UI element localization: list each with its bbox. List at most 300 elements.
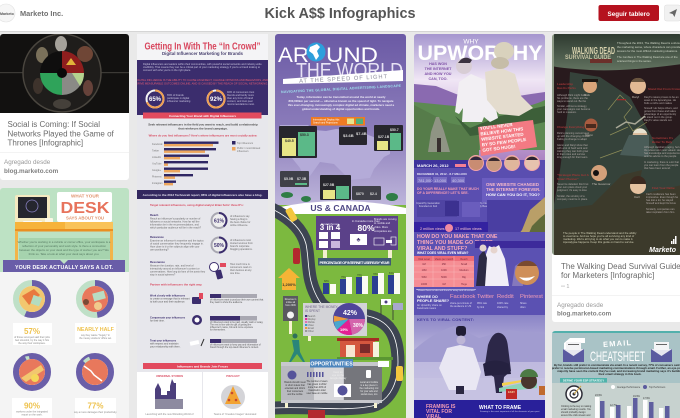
panel: usage stats: 80% [357,223,375,233]
pie chart: 19% [340,327,348,332]
panel: opportunities: is a key piece in [360,384,378,387]
right text columns: Sometimes It's [652,136,673,140]
chart legend [611,385,666,389]
panel: where the money is spent: Other [308,330,314,333]
map box: Western Europe: $7.4B [356,131,367,136]
map box: Western Europe [339,127,367,145]
bar chart [152,141,261,185]
map box: Latin America: $7.3B [297,177,307,181]
panel: purple intro [136,60,268,115]
right text columns: to stand out in the group. [644,115,673,119]
panel: usage stats: ♣ [357,238,361,244]
intro paragraph: 800,000km per second — otherwise known as the speed of light. To navigate [288,99,394,103]
callout: growth: online ad [286,302,296,304]
stat band: 2 million views [420,227,445,231]
panel: opportunities: user base on mobile [307,392,328,395]
pin: Around the World at the Speed of Light [270,34,406,418]
infographic: Walking Dead: scariest things in the series. [617,59,652,63]
left text columns: Change Everything [557,125,585,129]
infographic title: AR [278,44,309,67]
text: resonance: Resonance [150,260,165,264]
pink table: 25K [442,263,447,266]
panel: framing [414,400,545,418]
right text columns: and his advice to the people [644,154,677,158]
pink table: 1M [442,283,446,286]
panel: opportunities: Brands should invest [284,381,306,384]
panel: opportunities: and the mobile [287,393,303,396]
bar chart: 19.9% [633,395,641,398]
bar chart: internet users: 81% [389,272,395,275]
pink table: 100K [441,269,447,272]
stat: nearly half: say they waste "hugely" in [81,334,111,337]
infographic title: WHY [463,38,479,46]
callout: pink box: BY SO FEW PEOPLE [482,137,526,147]
bar chart: Google+ [152,169,162,172]
panel: opportunities: entertain and inform [285,387,305,390]
left text columns: Glenn and Daryl show that [557,143,588,147]
bar chart: internet users [323,272,400,294]
pink table: 10M [422,269,426,272]
text: relevance [150,236,204,251]
map box: North America: $50.3 [300,133,309,137]
bar chart: Twitter [152,150,159,152]
panel: usage stats: Brands are moving [374,217,397,221]
text: reach: Reach [150,213,159,217]
panel: timeline: Upworthy Fire [472,202,488,205]
intro paragraph: this ever-changing, increasingly complex digital ad climate, marketers need a [288,103,395,107]
text: resonance: Measure the duration, rate, and level of [150,264,194,268]
legend [311,117,365,126]
photo: couple and laughing man [475,241,545,286]
panel: where the money is spent: WHERE THE MONEY [305,305,339,309]
stat: 57%: of those surveyed said their jobs [14,336,51,339]
right text columns: In marketing, there is a lot that [644,160,679,164]
infographic title: EMAIL [603,338,632,349]
panel: timeline: DO YOUR REALLY MAKE THAT MUCH [417,187,479,191]
section bar: connecting your brand: Connecting Your Brand with Digital Influencers [169,114,236,118]
left text columns: Similar, without a strategy, [557,104,587,108]
callout: pink box: WEBSITE STARTED [481,132,525,142]
figure: man and dog [455,42,533,122]
map box: Middle East and Africa: $870 [356,192,364,196]
like count: ▫▫ 1 [561,284,570,290]
icon: yellow arrow 1,200% [278,268,300,290]
map box: North America [279,126,317,158]
closing paragraph: to overcome. And we hope you're all surviving any kind of [563,234,634,238]
road [270,208,398,409]
pink table: 500K [441,276,447,279]
row: treat: Treat your influencers [150,340,177,342]
panel: purple intro: content, and trust peer [227,99,253,103]
panel: viral story: THING YOU MADE GO SUPER [417,240,493,246]
bar chart: Facebook [152,143,163,146]
map box: Asia Pacific [374,125,403,151]
sharing platforms: Twitter [477,294,494,300]
row: work closely: Work closely with influencers [150,294,186,298]
sharing platforms: 99% rate [477,302,488,305]
left text columns: up with the changing climate. [557,134,591,138]
callout: pink box: YOU'LL NEVER [480,122,514,131]
stat: 90%: report on the work. [22,414,43,416]
bar chart: Top influencers [237,142,254,145]
icon: globe [306,42,326,62]
pin: Getting In With The In Crowd: their devices at any [230,269,252,272]
source credit: Agregado desde [557,302,604,309]
panel: framing: Framing is the most important of all the elements of your post [480,410,540,413]
bar chart: internet users: 78% [373,273,379,276]
left text columns: Failing to change to adapt [557,137,587,141]
stat: nearly half: the messy workers' office set. [79,337,112,340]
panel: timeline: The Daily Beast [471,205,489,208]
pin: Getting In With The In Crowd: blogging operations. [230,248,253,251]
row: treat: with respect and maintain [150,342,179,346]
callout: pink box: GOT SO HUGE! [482,144,516,153]
stat: 77% [74,356,117,418]
infographic: Game of Thrones wheel [0,34,129,113]
panel: opportunities: the marketing mix [360,387,379,390]
infographic: Walking Dead: Glenn [585,133,593,137]
callout: pink box [478,120,537,156]
characters [582,78,648,194]
left text columns: training they can both grow [557,149,588,153]
pin: Getting In With The In Crowd: of influencers say [230,215,250,218]
infographic: Walking Dead: Carl [634,195,640,199]
share button [664,5,680,21]
banner [3,260,125,272]
panel: purple intro: influencer marketing [167,99,191,103]
pin: Getting In With The In Crowd: brand's corporate [230,245,250,248]
map box: North America: $40.5 [285,139,294,143]
left text columns: company must be in place. [557,197,588,201]
right text columns: grows from these and takes [644,109,677,113]
intro paragraph: Today, information can be transmitted around the world at nearly [296,95,386,99]
right text columns: Find Your Niche [652,186,675,190]
text: resonance [150,260,206,276]
right text columns: has lost a lot, he stayed [646,198,674,202]
right text columns: you can learn from the people [644,163,679,167]
panel: opportunities: has grown in 2012 [308,383,327,386]
map box: Latin America [280,171,309,187]
board title: Kick A$$ Infographics [264,6,416,22]
left text columns: ways to stand out. Be the [557,99,587,103]
intro text: their email strategy in this book. [599,372,642,376]
section bar: connecting your brand [143,112,262,118]
sharing platforms: Pinterest [520,294,543,300]
left text columns: long enough for their team. [557,155,588,159]
sharing platforms: share-per-minute of [450,302,472,305]
row: compensate [150,315,263,332]
panel: timeline: 40,300 [452,178,465,183]
panel: opportunities: Facebook's total [309,389,326,392]
panel: opportunities: Google display [330,377,347,380]
banner: YOUR DESK ACTUALLY SAYS A LOT. [15,265,114,271]
section heading: Target relevant influencers, using digital analyst Brian Solis' three R's: [150,203,244,207]
row: treat [150,339,261,349]
icon: storefront [337,338,393,360]
card: Universal Studios: Launching with the new Wizarding World of [146,413,194,416]
left text columns: Never be deluded. Don't let [557,182,589,186]
sharing platforms: Facebook means [417,307,437,310]
source credit: blog.marketo.com [4,168,59,175]
text: relevance: Examine an influencer's expertise and the topics [150,240,204,242]
text: resonance: interactivity around an influencer's content or [150,268,200,270]
section bar: joining forces [143,363,262,369]
heading card: WHAT YOUR [71,194,100,198]
stat band [414,222,488,232]
closing paragraph: Apocalypse happens. Keep this guide on hand to survive. [563,240,634,244]
pink table: Views per month [435,258,454,261]
stat: 61%: 61% [214,218,225,224]
panel: purple intro: Digital influencers are leaders within their communities, with powerful social networks and industry-wide [143,62,262,66]
pin title: Social is Coming: If Social [8,120,100,129]
right text columns [644,87,680,214]
panel: purple intro: recommendations most. [227,102,255,106]
panel: timeline [414,160,545,222]
panel: usage stats: video. More [374,225,389,229]
infographic: Walking Dead [546,34,680,255]
bar chart: influencers [237,150,249,153]
chart heading: PERCENTAGE OF INTERNET USERS BY YEAR [320,260,390,265]
panel: timeline: ONE WEBSITE CHANGED [486,182,539,187]
bar chart: internet users: 76% [357,274,363,277]
stat: 92%: 92% [210,97,223,103]
pin: Why Upworthy [414,34,545,418]
panel: where the money is spent: Email [308,328,314,330]
row: work closely: to both your and their audience. [150,300,185,304]
yellow map lines [600,95,647,158]
panel: purple intro: credibility. That means they can be a critical part of your marketing strategy if you're a brand looking to [143,65,261,69]
right text columns: impressive. Even though he [646,195,679,199]
Marketo logo [649,236,677,254]
panel: timeline: MARCH 26, 2012 [417,163,449,168]
panel: opportunities: OPPORTUNITIES [310,362,353,368]
text: resonance: stay in social spheres? [150,274,176,276]
pink table: 1M [422,263,426,266]
section bar: Technorati [137,190,268,199]
row: work closely: they want to show the audience. [210,301,243,304]
bar chart: 23.9% [595,394,603,397]
sharing platforms: An Upworthy share on [417,304,442,307]
stat: 57%: 57% [24,327,40,336]
stat band: 17 million views [455,227,482,231]
panel: opportunities: in short videos that [285,384,305,387]
panel: purple intro: 92% of consumers trust [227,90,255,94]
panel: purple intro: participate in digital [167,96,190,100]
map box: Middle East and Africa [352,186,381,200]
row: work closely [150,293,264,304]
intro text: between the objects on your desk and the type of worker you are? We [19,248,109,252]
left text columns: with a lot of hard work and [557,146,588,150]
left text columns: your campaigns can become [557,107,591,111]
panel: usage stats: companies are [374,229,392,233]
intro text: Whether you're working in a cubicle or corner office, your workspace is a [18,240,111,244]
pin: Getting In With The In Crowd: having a blog is [230,218,248,221]
panel: timeline: 13,000 [434,178,447,183]
row: compensate: influencer's name, link and more exposure [210,326,254,329]
sharing platforms [417,294,543,310]
text: relevance: Relevance [150,235,164,239]
pin: Getting In With The In Crowd: How much time is [230,263,250,266]
bar chart: LinkedIn [152,156,162,159]
stat: 50% [212,238,226,252]
panel: purple intro: than any form of brand [227,96,254,100]
panel: opportunities: their consumers [287,390,304,393]
panel: opportunities: for your ads and [360,390,378,393]
panel: where the money is spent: Video [308,325,315,327]
panel: viral story: VIRAL AND STUFF? [417,246,467,252]
photo panel: keys to viral content: KEYS TO VIRAL CONTENT: [417,317,474,322]
right text columns: asset in the Apocalypse. He [644,98,677,102]
right text columns: Daryl's value stands out. [644,118,672,122]
infographic: Walking Dead: SURVIVAL GUIDE [565,54,612,61]
icon: Marketo avatar: Marketo [0,12,15,16]
pink table: Big [462,276,466,279]
panel: viral story: HOW DO YOU MAKE THAT ONE [417,234,498,240]
pin: Getting In With The In Crowd: the best choice for [230,221,251,224]
callout: growth: Revenue in [285,299,297,301]
panel: opportunities: Local and mobile [360,381,379,384]
pin: Getting In With The In Crowd [136,34,268,418]
panel: opportunities: eye on the [332,374,344,377]
card: Pizza Hut: PIZZA HUT [226,374,240,378]
bar chart [595,394,670,418]
pin title: The Walking Dead Survival Guide [561,262,680,271]
sharing platforms: Share [520,302,527,305]
panel: timeline: Upworthy Generation [416,202,440,205]
bar chart: 17.9% [643,397,651,400]
tagline: AND HOW YOU [425,72,452,76]
card: Pizza Hut: Teams of “Creative Images” decorated [214,413,257,416]
panel: timeline: HOW CAN YOU DO IT, TOO? [486,192,540,197]
panel: opportunities: Keep an [333,371,343,374]
card: Universal Studios [137,372,202,418]
right text columns: himself and kept his focus [646,201,677,205]
stat: 90%: 90% [24,402,40,410]
panel: usage stats: 3 in 4 [320,223,341,232]
panel: usage stats [316,216,398,258]
pin: Getting In With The In Crowd: online influence. [230,224,248,227]
chart legend: Top Performers [649,386,666,389]
text: relevance: of social conversation they frequently engage in. [150,242,204,246]
cars on road [285,207,403,418]
white hill [275,201,406,214]
bar chart: Instagram [152,182,163,185]
text: reach: information be in the recommendations, and [150,224,199,226]
panel: timeline: 781,000 [418,178,433,183]
panel: usage stats: Smartphones [321,222,339,226]
callout: growth [283,296,298,334]
text: reach [150,214,201,229]
stat: 90%: workers under the integrated [16,410,49,414]
tagline: CAN, TOO. [428,77,448,81]
bar chart: internet users: 68% [324,280,330,283]
map box: Eastern Europe: $27.5B [323,183,335,187]
pie chart: 30% [353,323,364,329]
sharing platforms: shared by [497,306,509,309]
map box: Asia Pacific: $50.7 [390,128,399,132]
closing paragraph: The people in The Walking Dead understand and the ability [563,231,637,235]
account name: Marketo Inc. [20,9,63,18]
intro text: majority have seen the content they've read, and increasing brand marketing says it's building [557,369,680,373]
text: resonance: conversations. How long do fans of the posts they [150,270,206,274]
bar chart: 12.7% [610,404,618,407]
sharing platforms: PEOPLE SHARE? [417,299,450,303]
stat: 90% [12,356,52,418]
bar chart: Public / most-followed [237,147,261,150]
flags [381,299,403,320]
chart legend: Average Performance [617,386,641,389]
left text columns: hard to measure. [557,110,577,114]
target text: email marketing results. You [561,408,592,411]
pin: Walking Dead Survival Guide [546,34,680,322]
panel: timeline: Founded on Feb [419,205,438,208]
chart heading: Where do you find influencers? Here's where influencers are most socially active: [149,134,257,138]
panel: purple intro: connect with who you're in the right place. [143,68,191,72]
infographic: Walking Dead: Hershel [634,145,645,149]
panel: where the money is spent: Search [308,315,316,318]
panel: timeline: OF A DIFFERENCE? LET'S SEE. [417,191,469,195]
infographic: Walking Dead: Daryl [632,95,639,99]
hills [414,84,545,164]
section bar: Technorati: According to the 2013 Technorati report, 86% of digital influencers also have a blog. [143,193,262,197]
pink table: 100M [421,283,427,286]
sharing platforms: 100% rate [497,302,509,305]
panel: framing: VITAL FOR [426,409,452,415]
stat: 77%: say a mess damages their productivity. [74,411,117,414]
text block: Seek relevant influencers in the field you want to reach, and build a relationship [148,122,258,126]
panel: timeline: THE INTERNET FOREVER. [486,187,540,192]
icon: right envelope [651,342,672,362]
pin: Getting In With The In Crowd: consumers read on [230,266,252,269]
lower panel [552,383,680,418]
map box: Middle East and Africa: $2.4 [370,192,377,196]
infographic: Walking Dead: Rick [584,93,590,97]
panel: viral story: *Viewers have no idea and share for many sorts of reasons! [417,289,475,292]
intro text: think so. Take a look at what your desk says about you. [29,252,100,256]
panel: purple intro: 65% of brands [167,93,184,97]
left text columns [556,82,591,201]
stat: 57%: the way their workspace. [18,342,46,345]
right text columns: finds a niche and makes [644,101,673,105]
left text columns: "Strategic Plans Get A [557,173,590,177]
source credit [557,302,612,318]
infographic: Walking Dead: The zombies in The Walking Dead are one of the [617,55,678,59]
pin: Getting In With The In Crowd: trusted sources from [230,242,253,245]
icon: left envelope [563,338,585,362]
panel: where the money is spent: Mobile [308,322,315,324]
infographic title [590,338,645,364]
section label: DEFINE YOUR ESP STRATEGY [563,379,604,383]
left text columns: Has Its Perks [557,86,576,90]
source credit [4,159,59,175]
section heading: US & CANADA [310,203,371,213]
right text columns: himself. He helps others, and [644,106,678,110]
text: relevance: How close is it to the subjects align with your [150,246,200,248]
photo: rocky cliff [487,197,545,242]
section heading: Partner with influencers the right way. [150,282,202,286]
panel: timeline: DECEMBER 31, 2012 · 8.7 MILLION [417,172,467,176]
stat: 50%: 50% [214,243,225,249]
right text columns: Carl's resilience has been [646,192,676,196]
left text columns: Smart Planner" [557,177,579,181]
chart heading [318,258,391,266]
right text columns: Although Hershel is aging, he's [644,145,680,149]
source credit: blog.marketo.com [557,310,612,318]
text: relevance: own positioning? [150,248,169,252]
infographic title: NAVIGATING THE GLOBAL DIGITAL ADVERTISING LANDSCAPE [281,84,402,94]
row: work closely: of influencers want to produce their own content that [210,298,264,302]
panel: purple intro: DIGITAL INFLUENCE IS THE ABILITY TO CAUSE AN EFFECT, CHANGE OPINIONS AND BEHAVIORS, AND [136,78,268,82]
